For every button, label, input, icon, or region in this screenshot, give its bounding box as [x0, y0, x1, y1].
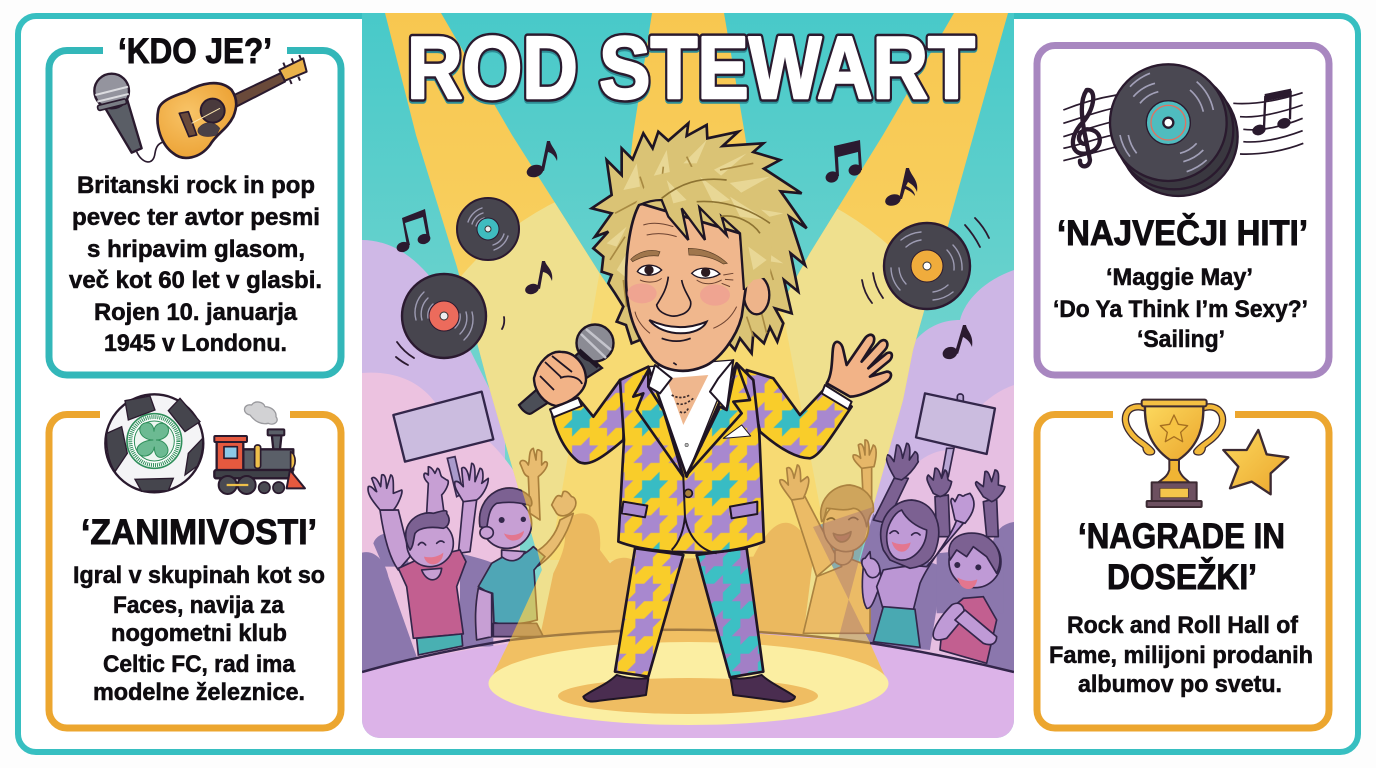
left shoe [583, 675, 648, 701]
heading: ‘ZANIMIVOSTI’ [81, 513, 317, 552]
kid in pink shirt [933, 533, 1001, 663]
record orange [884, 223, 970, 309]
left sleeve [552, 380, 627, 463]
title: ROD STEWART [407, 18, 975, 117]
body text: albumov po svetu. [1078, 671, 1282, 698]
hair highlights [607, 140, 783, 277]
icon: steam locomotive [214, 402, 305, 494]
shirt button [685, 443, 688, 447]
stage lit area [488, 628, 888, 725]
note [941, 325, 972, 361]
icon: gold star [1223, 430, 1288, 494]
head with spiky blond hair [592, 123, 807, 371]
record coral [402, 274, 486, 358]
waving crowd: left-hand fans [368, 392, 576, 655]
body text: nogometni klub [111, 620, 287, 647]
body text: Faces, navija za [113, 592, 285, 619]
heading: ‘KDO JE?’ [118, 32, 272, 71]
cheeks [627, 283, 730, 306]
lit crowd silhouettes [540, 513, 813, 637]
note [525, 141, 557, 179]
waving hand [827, 335, 892, 397]
hair fringe [635, 163, 773, 290]
suit jacket with sleeves [550, 360, 852, 553]
card border [1037, 46, 1329, 375]
brown wedge of partial shadow [813, 507, 873, 643]
body text [73, 562, 325, 706]
lapels [633, 363, 750, 477]
nose [657, 277, 691, 316]
body text: s hripavim glasom, [87, 236, 305, 263]
Rod Stewart cartoon performer [519, 123, 892, 702]
hair back [592, 123, 807, 353]
unlit crowd silhouettes [360, 533, 493, 673]
unlit fans group [367, 390, 541, 656]
fringe outline [640, 200, 744, 290]
chest hair [672, 395, 693, 413]
button [684, 489, 692, 497]
shirt [648, 360, 733, 477]
bare chest [667, 375, 708, 425]
placard [393, 392, 493, 497]
jacket front edge [672, 477, 717, 553]
boy in teal shirt [474, 487, 541, 641]
card border [1037, 414, 1329, 728]
song list: ‘Do Ya Think I’m Sexy?’ [1053, 296, 1308, 323]
icon: trophy [1125, 400, 1223, 507]
lit boy in teal shirt (sunlit side) [476, 488, 576, 640]
shadow under performer [558, 678, 818, 714]
boy in pink shirt [368, 463, 488, 655]
unlit fans on the right [862, 393, 1005, 663]
motion lines [396, 218, 989, 365]
icon: microphone and guitar [94, 55, 307, 162]
fringe highlights [667, 177, 767, 270]
pale spotlight glow [461, 202, 924, 642]
heading [1078, 517, 1285, 597]
spotlight beams [385, 13, 1008, 643]
body text: več kot 60 let v glasbi. [69, 267, 322, 294]
panel: Največji hiti [1037, 46, 1329, 375]
collar [648, 360, 733, 410]
right trouser leg [697, 548, 763, 677]
lit raised hand [520, 448, 547, 520]
pocket square [723, 425, 751, 438]
double note [395, 209, 432, 254]
body text: Igral v skupinah kot so [73, 562, 325, 589]
face [626, 203, 746, 371]
body text: Celtic FC, rad ima [103, 651, 296, 678]
smile [649, 320, 707, 333]
lower lip and chin [662, 338, 691, 365]
body text: Rojen 10. januarja [94, 299, 298, 326]
icon: football with club crest [105, 394, 203, 492]
title: ROD STEWART [407, 20, 975, 119]
card border [49, 414, 341, 728]
double note [824, 140, 863, 184]
body text [69, 172, 322, 357]
central warm beam [550, 270, 830, 560]
record teal [457, 198, 519, 260]
body text: Britanski rock in pop [77, 172, 315, 199]
title: ROD STEWART [407, 18, 975, 117]
panel: Nagrade in dosežki [1037, 400, 1329, 728]
hair shading strands [610, 157, 773, 337]
microphone [519, 324, 614, 414]
girl [862, 493, 974, 647]
song list: ‘Sailing’ [1137, 326, 1225, 353]
body text: pevec ter avtor pesmi [72, 204, 320, 231]
panel: Kdo je [49, 32, 341, 375]
eyebrows [631, 248, 727, 264]
cuffs [550, 385, 852, 417]
teal stage backdrop [362, 13, 1014, 738]
body text [1049, 612, 1313, 698]
card border [49, 50, 341, 375]
central illustration panel [360, 13, 1020, 768]
song list [1053, 264, 1308, 353]
heading: DOSEŽKI’ [1107, 557, 1257, 597]
waving crowd: lit boy on the right [780, 440, 876, 633]
stage floor [362, 631, 1014, 738]
note [524, 261, 552, 296]
fist gripping microphone [534, 352, 586, 406]
heading: ‘NAJVEČJI HITI’ [1057, 213, 1308, 253]
song list: ‘Maggie May’ [1106, 264, 1253, 291]
floating music notes [395, 140, 972, 361]
trousers and shoes [583, 548, 795, 702]
jacket body [618, 363, 764, 553]
icon: record on music staff [1063, 64, 1303, 196]
eyes [637, 265, 720, 278]
panel: Zanimivosti [49, 394, 341, 728]
body text: Rock and Roll Hall of [1067, 612, 1299, 639]
body text: 1945 v Londonu. [104, 330, 287, 357]
face wrinkles [635, 223, 737, 333]
pale pool of light [488, 642, 888, 725]
right sleeve [747, 370, 852, 458]
girl's raised arm and fans' back hands [873, 443, 1005, 537]
double flag note [884, 168, 917, 208]
body text: Fame, milijoni prodanih [1049, 642, 1313, 669]
fringe strands [662, 179, 770, 233]
stage edge line [362, 630, 1014, 672]
right placard [916, 393, 995, 477]
left trouser leg [615, 548, 683, 677]
ear [744, 276, 769, 314]
background clouds [362, 240, 1014, 690]
body text: modelne železnice. [93, 679, 305, 706]
heading: ‘NAGRADE IN [1078, 517, 1285, 556]
floating vinyl records [396, 198, 989, 365]
right shoe [731, 675, 795, 702]
pocket flaps [622, 502, 757, 518]
